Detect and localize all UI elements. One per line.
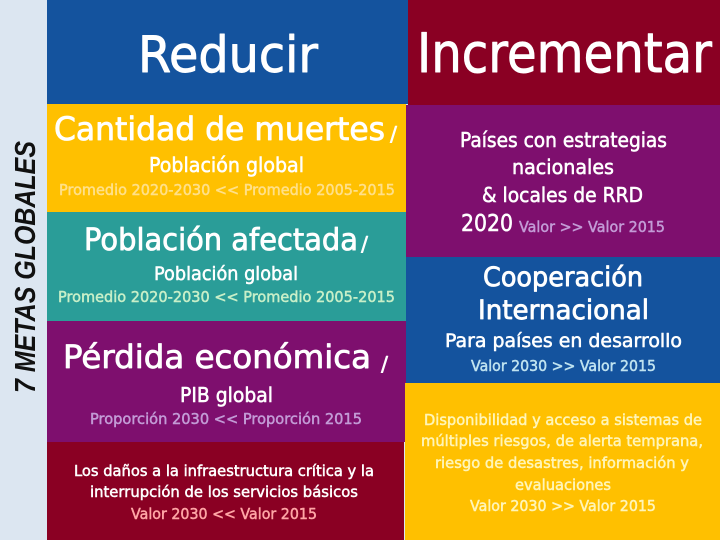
panel: pérdida económica: Pérdida económica [63,338,371,376]
panel: cantidad de muertes: Promedio 2020-2030 << Promedio 2005-2015 [59,181,395,199]
panel: daños a la infraestructura: interrupción de los servicios básicos [90,483,358,501]
panel: cooperación internacional: Internacional [478,295,649,326]
panel: sistemas de alerta temprana: Disponibilidad y acceso a sistemas de [424,411,702,429]
panel: cantidad de muertes [47,104,406,212]
panel: estrategias nacionales y locales [406,105,720,257]
panel: estrategias nacionales y locales: Países con estrategias [460,128,667,152]
panel: estrategias nacionales y locales: nacionales [512,155,614,179]
panel: daños a la infraestructura: Valor 2030 << Valor 2015 [131,505,317,523]
panel: estrategias nacionales y locales: & locales de RRD [482,183,643,207]
heading: Reducir: Reducir [138,26,318,84]
panel: población afectada: Población afectada [84,223,358,258]
panel: cantidad de muertes: Cantidad de muertes [54,110,385,148]
panel: daños a la infraestructura [47,442,404,540]
panel: sistemas de alerta temprana: riesgo de desastres, información y [435,454,689,472]
panel: sistemas de alerta temprana: evaluaciones [515,476,611,494]
side strip: 7 metas globales [0,0,47,540]
panel: cooperación internacional: Cooperación [483,262,643,293]
panel: sistemas de alerta temprana: múltiples riesgos, de alerta temprana, [421,432,703,450]
panel: pérdida económica: PIB global [180,383,273,407]
panel: cooperación internacional [406,257,720,383]
panel: población afectada: Población global [154,263,298,285]
panel: población afectada: / [361,232,368,256]
panel: estrategias nacionales y locales: Valor >> Valor 2015 [519,218,665,236]
panel: daños a la infraestructura: Los daños a la infraestructura crítica y la [74,462,374,480]
panel: sistemas de alerta temprana: Valor 2030 >> Valor 2015 [470,497,656,515]
heading: Incrementar [408,0,720,105]
panel: estrategias nacionales y locales: 2020 [461,211,513,237]
panel: cooperación internacional: Para países en desarrollo [445,330,682,352]
panel: cantidad de muertes: Población global [149,153,304,177]
panel: pérdida económica: / [381,352,388,376]
panel: población afectada: Promedio 2020-2030 << Promedio 2005-2015 [58,288,395,306]
heading: Reducir [47,0,408,104]
panel: cooperación internacional: Valor 2030 >> Valor 2015 [471,357,656,375]
panel: cantidad de muertes: / [390,122,397,146]
panel: población afectada [47,212,406,321]
side strip: 7 metas globales: 7 METAS GLOBALES [10,140,42,393]
panel: pérdida económica [47,321,406,442]
panel: pérdida económica: Proporción 2030 << Proporción 2015 [90,410,362,428]
panel: sistemas de alerta temprana [405,383,720,540]
